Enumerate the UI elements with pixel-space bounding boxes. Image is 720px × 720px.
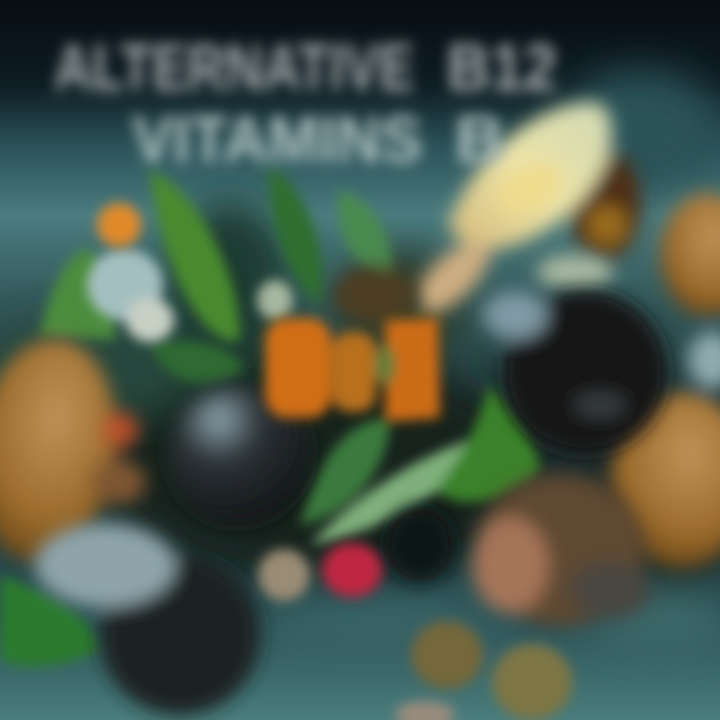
red berry — [258, 543, 382, 601]
cream squash slice — [415, 102, 641, 315]
orange flower — [97, 203, 141, 247]
mottled round fruit — [472, 474, 650, 626]
title: blurred heading — [54, 30, 557, 176]
title line 1: ALTERNATIVE — [54, 30, 414, 104]
title line 1 second word: B12 — [447, 30, 557, 104]
small olives — [395, 621, 572, 720]
title line 2 second word: B — [455, 102, 505, 176]
small bottle and brown mid objects — [333, 254, 613, 323]
right potatoes — [610, 193, 720, 568]
orange carrot pieces — [265, 318, 440, 422]
leaves — [0, 165, 539, 667]
title line 2: VITAMINS — [132, 102, 422, 176]
white flower cluster — [87, 249, 293, 342]
left potato — [0, 329, 146, 571]
dark berries — [35, 290, 667, 715]
